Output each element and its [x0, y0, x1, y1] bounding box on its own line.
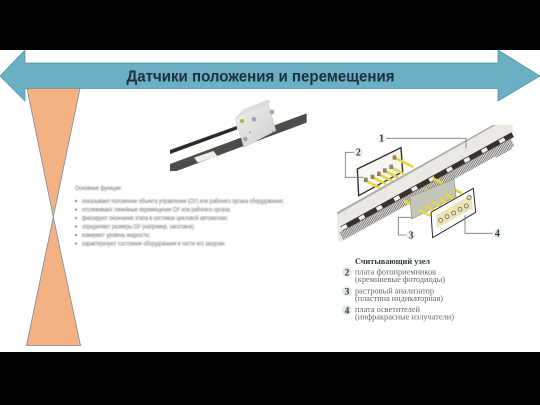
callout numbers: 4: [495, 229, 500, 240]
photodiodes: [364, 155, 396, 182]
yellow rods upper: [366, 158, 413, 188]
bullet list: характеризуют состояние оборудования в части его загрузки.: [82, 241, 226, 248]
tape label: [194, 151, 217, 163]
heading: main functions: Основные функции:: [75, 185, 122, 192]
cable: [170, 126, 237, 154]
sensor photo: [170, 99, 307, 171]
bullet list: показывают положение объекта управления (ОУ) или рабочего органа оборудования;: [82, 198, 284, 205]
legend item 4: [342, 305, 454, 322]
text block: main functions: [75, 185, 284, 248]
legend item 2: 2: [345, 268, 350, 278]
legend item 2: (кремниевые фотодиоды): [355, 275, 445, 284]
title: Датчики положения и перемещения: [126, 68, 394, 85]
bullet list: [75, 198, 284, 248]
callout numbers: [354, 134, 502, 241]
legend item 4: 4: [345, 306, 350, 316]
legend item 3: (пластина индикаторная): [355, 294, 443, 303]
legend: reading unit: [342, 256, 454, 322]
magnetic tape: [170, 113, 307, 171]
legend item 2: плата фотоприемников: [355, 268, 436, 276]
yellow rods lower: [404, 178, 462, 208]
title double arrow banner: [0, 50, 540, 101]
sensor top face: [235, 99, 270, 118]
callout numbers: 2: [356, 148, 361, 159]
sensor screws: [243, 110, 274, 141]
legend item 4: (инфракрасные излучатели): [355, 312, 454, 322]
yellow rods through analyser: [419, 195, 457, 216]
raster analyser plate: [410, 179, 456, 219]
callout numbers: 3: [408, 230, 413, 241]
bullet list: измеряют уровень жидкости;: [82, 232, 150, 239]
legend item 3: 3: [345, 288, 350, 298]
illuminator plate: [431, 188, 476, 238]
hourglass orange shape: [26, 88, 80, 346]
sensor LED: [240, 119, 244, 123]
bullet list: отслеживают линейные перемещения ОУ или рабочего органа;: [82, 207, 231, 214]
optical encoder diagram: [337, 125, 513, 242]
bullet list: определяют размеры ОУ (например, заготовок);: [82, 224, 195, 231]
white slide area: [0, 50, 540, 352]
leader lines: [345, 138, 512, 235]
legend item 3: [342, 286, 443, 303]
legend item 2: [342, 267, 445, 284]
scale ruler: [337, 125, 513, 242]
legend item 3: растровый анализатор: [355, 286, 434, 296]
legend item 4: плата осветителей: [355, 305, 421, 314]
callout numbers: 1: [379, 134, 384, 145]
photodetector plate: [357, 148, 403, 196]
legend heading: Считывающий узел: [355, 256, 430, 266]
bullet list: фиксируют окончание этапа в системах цикловой автоматики;: [82, 215, 228, 222]
sensor body: [235, 101, 276, 147]
